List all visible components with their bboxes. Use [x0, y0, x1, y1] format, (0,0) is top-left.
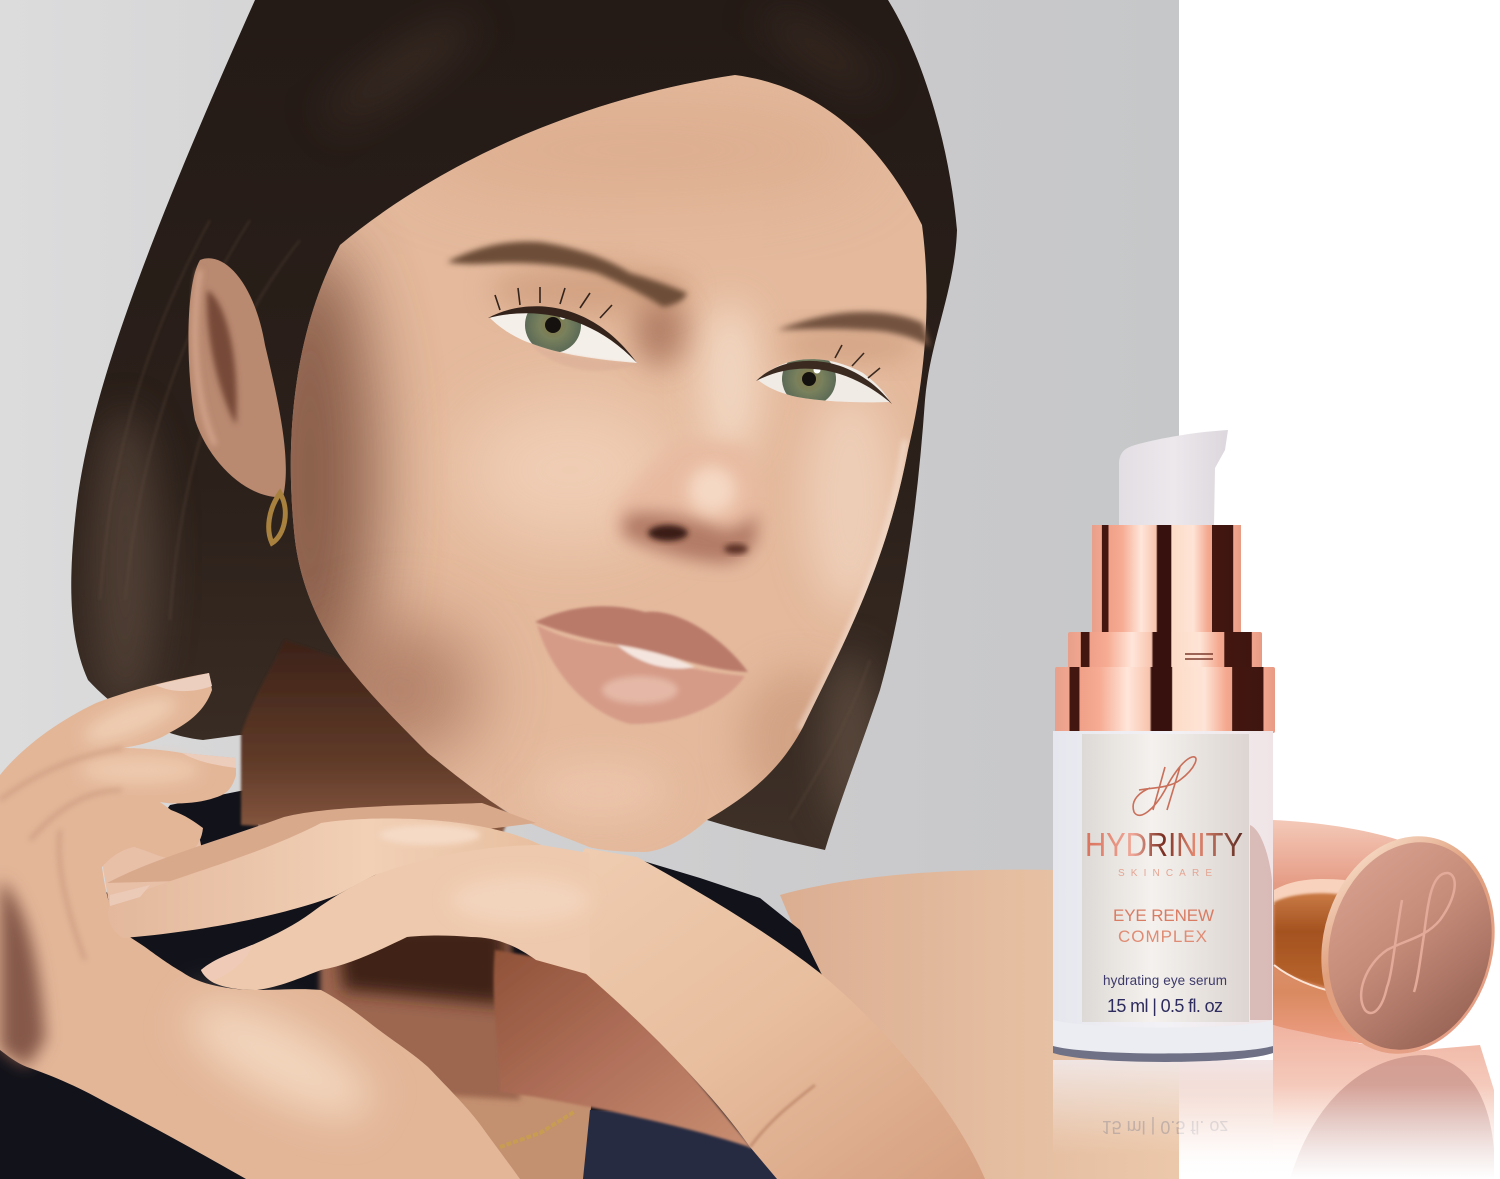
- rose gold collar lower: [1055, 667, 1275, 733]
- left eyebrow: [447, 242, 687, 307]
- cap bright band: [1274, 879, 1345, 905]
- face shading: [245, 100, 920, 820]
- pump slot: [1185, 654, 1213, 659]
- face: [291, 75, 927, 852]
- front finger: [201, 845, 590, 990]
- acrylic body: [1053, 731, 1273, 1031]
- product name line 1: EYE RENEW: [1113, 906, 1214, 925]
- volume: 15 ml | 0.5 fl. oz: [1107, 996, 1223, 1016]
- right eyebrow: [777, 312, 931, 347]
- hand shadows and highlights: [0, 880, 45, 1067]
- shoulder: [780, 870, 1179, 1179]
- palm: [494, 950, 752, 1148]
- product: pump bottle: [1053, 430, 1275, 1062]
- skincare: SKINCARE: [1118, 868, 1212, 879]
- inner cream: [1082, 734, 1249, 1022]
- neck: [241, 640, 510, 840]
- grey studio background: [0, 0, 1179, 924]
- product: floor reflections: [1053, 1025, 1500, 1179]
- back finger: [107, 803, 536, 883]
- cap dark interior: [1274, 893, 1345, 988]
- cap highlight line: [1274, 965, 1335, 992]
- black top: [0, 790, 822, 1179]
- rose gold collar upper: [1092, 525, 1241, 633]
- pump head: [1119, 430, 1228, 525]
- photo: model portrait on grey background: [0, 0, 1179, 1179]
- product: lying cap: [1273, 818, 1500, 1072]
- wrist crease: [750, 1085, 815, 1147]
- pale gap between left fingers: [102, 840, 202, 906]
- fade to white: [1179, 1085, 1500, 1179]
- label logo monogram: [1133, 757, 1196, 815]
- descriptor: hydrating eye serum: [1103, 973, 1227, 988]
- back of right hand and wrist: [583, 848, 985, 1179]
- ear: [188, 258, 286, 497]
- clear base: [1053, 1020, 1273, 1056]
- cap top disc: [1299, 818, 1500, 1072]
- rose gold collar middle: [1068, 632, 1262, 669]
- satin dress: [583, 1110, 785, 1179]
- nose: [613, 440, 761, 563]
- cap monogram: [1361, 873, 1455, 1013]
- left hand: [0, 673, 520, 1179]
- lips: [535, 606, 748, 724]
- reflection on right of bottle: [1250, 825, 1272, 1020]
- base edge: [1053, 1046, 1273, 1062]
- under finger and palm shadows: [320, 930, 520, 1100]
- left eye: [485, 287, 645, 371]
- dark gap between hands: [337, 925, 505, 1005]
- right eye: [755, 345, 895, 406]
- reflected volume text: 15 ml | 0.5 fl. oz: [1102, 1117, 1228, 1137]
- middle finger: [108, 818, 541, 938]
- hair: [60, 0, 970, 860]
- earring: [269, 493, 285, 543]
- product name line 2: COMPLEX: [1118, 927, 1207, 946]
- brand name: HYDRINITY: [1085, 826, 1243, 863]
- chest and necklace: [452, 1091, 591, 1179]
